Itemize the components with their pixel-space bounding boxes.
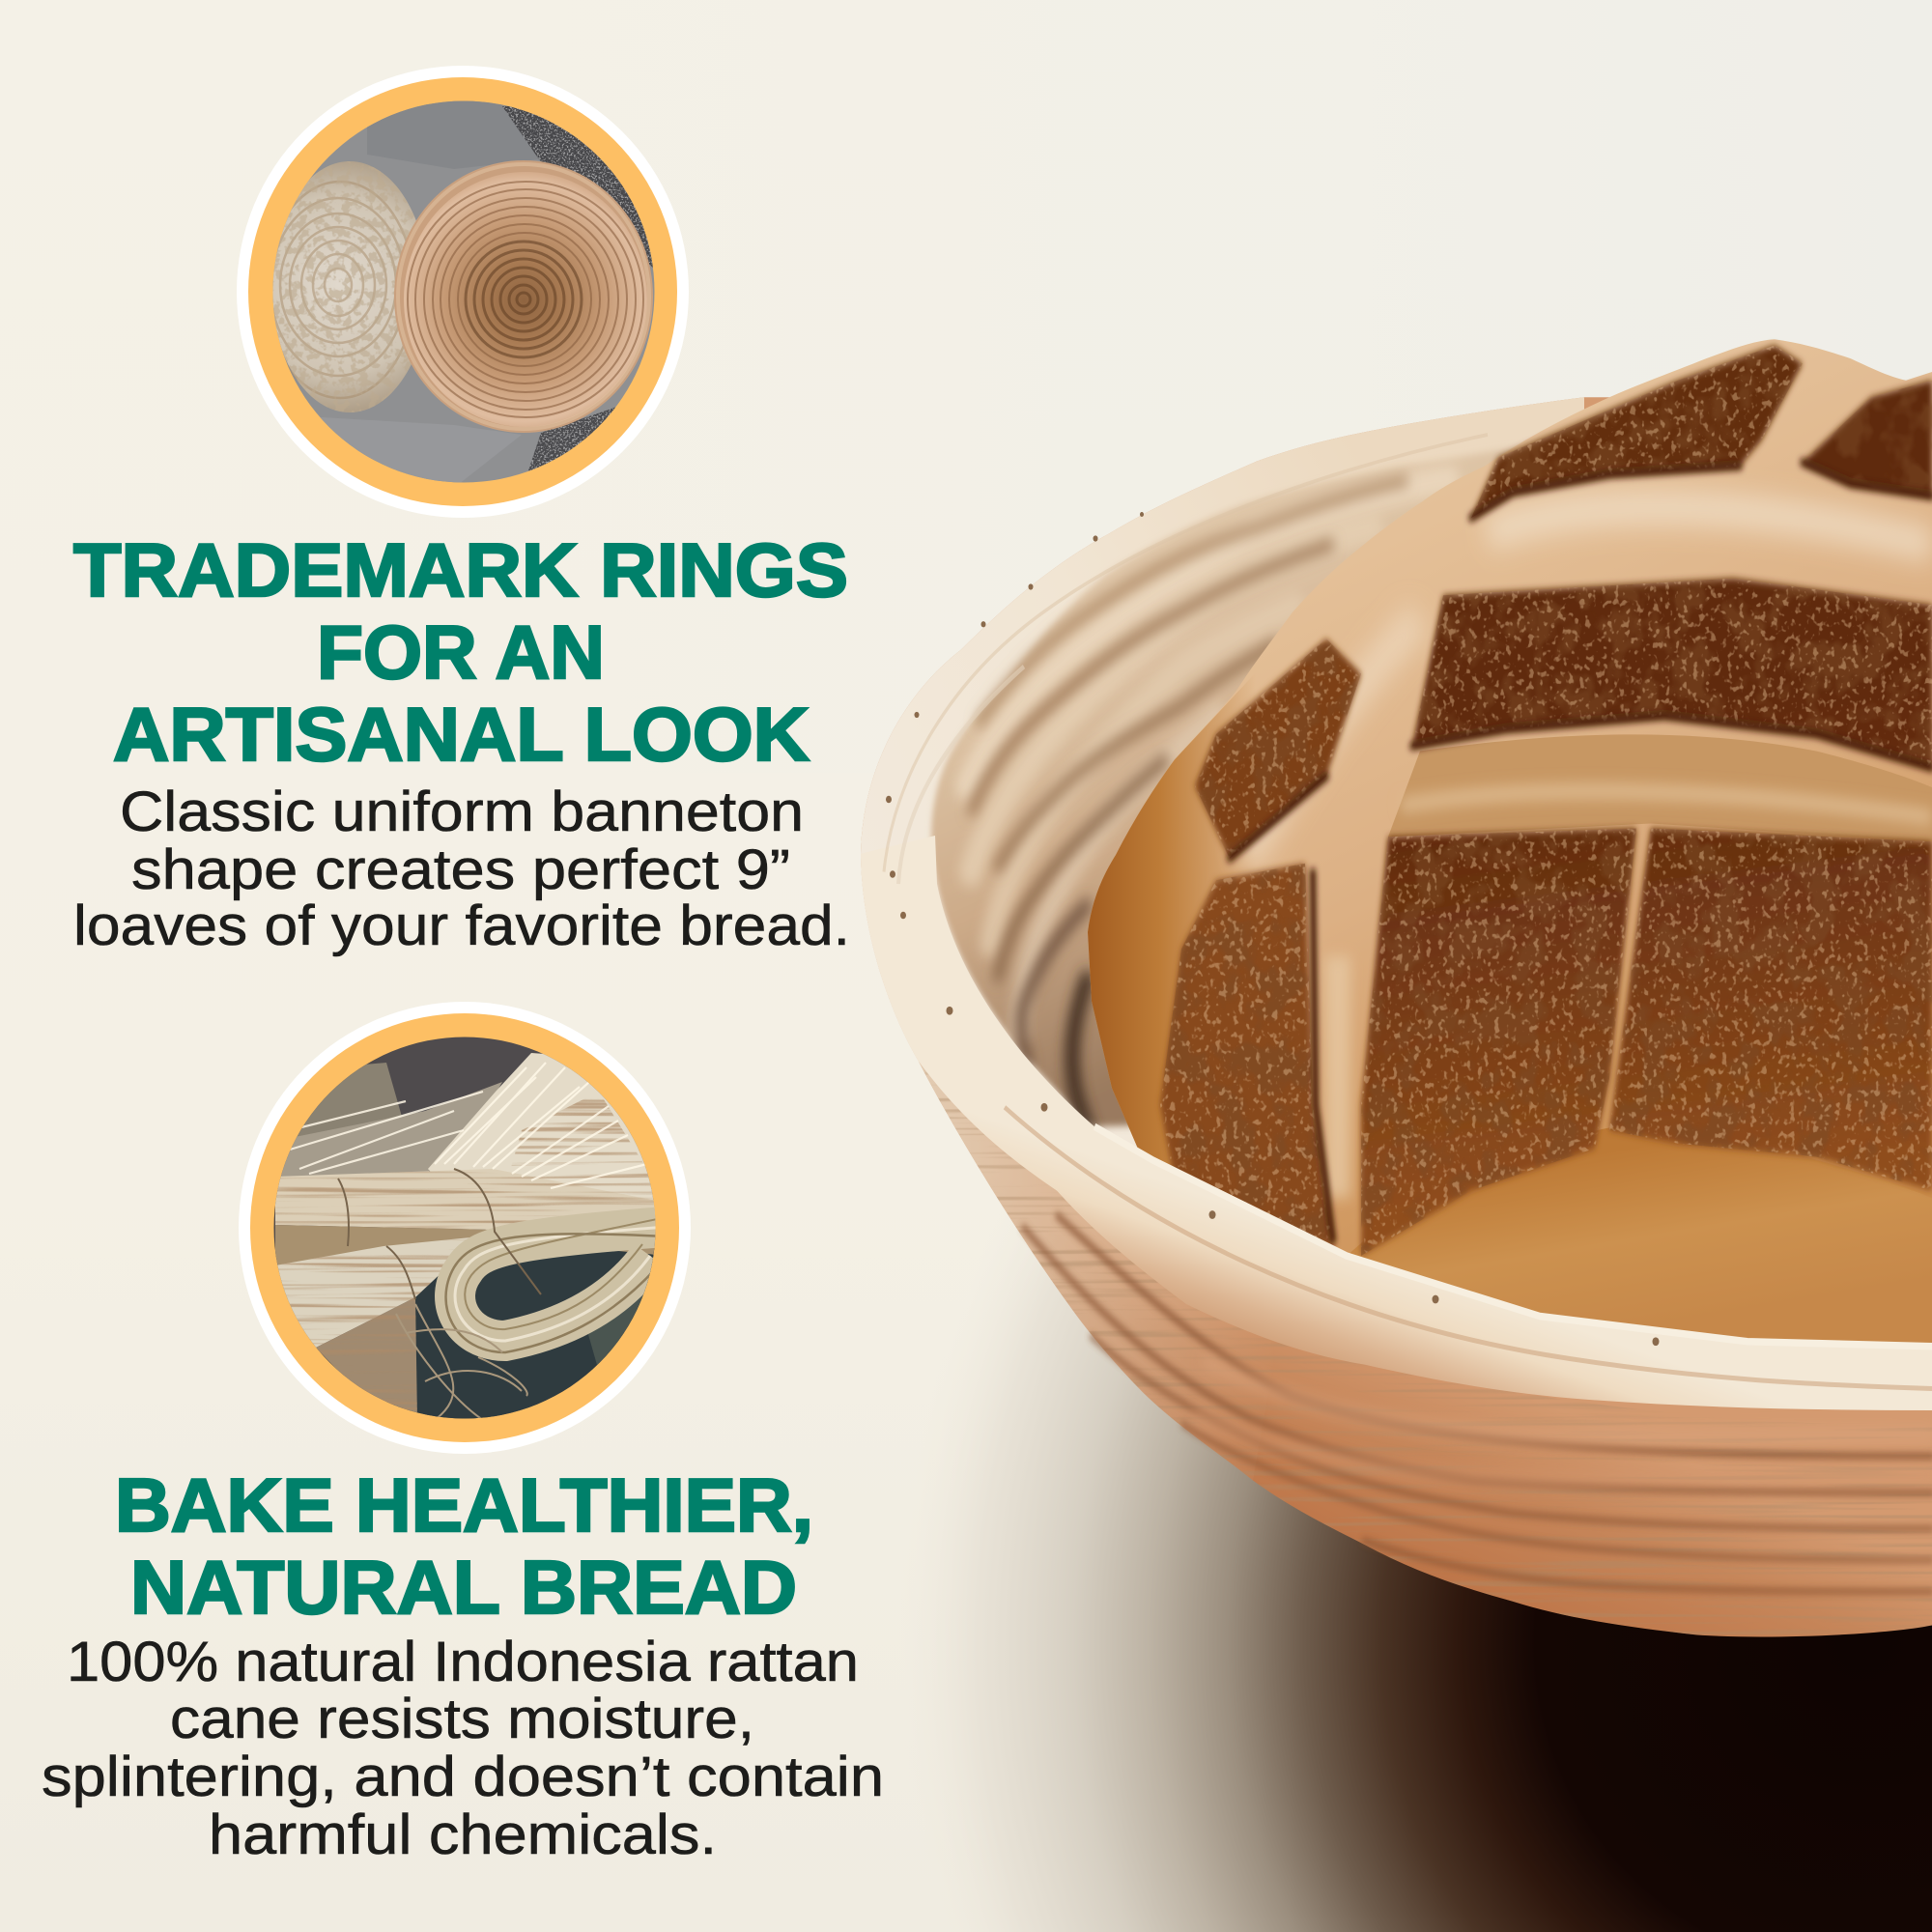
- loaf lower band: [1347, 1125, 1932, 1354]
- bowl interior wall: [931, 437, 1584, 1126]
- feature 1: heading: ARTISANAL LOOK: [113, 692, 810, 777]
- main bundle: [275, 1169, 667, 1232]
- feature 2: description: [42, 1631, 884, 1866]
- white ring: [239, 1002, 691, 1454]
- sourdough loaf: [1088, 339, 1932, 1354]
- loaf side: [1088, 672, 1256, 1209]
- cane loop: [446, 1217, 667, 1352]
- feature 1: description: Classic uniform banneton: [120, 781, 804, 843]
- photo: banneton and floured loaf: [272, 100, 655, 483]
- crust score shadows: [1230, 463, 1932, 1240]
- rim striations: [884, 435, 1932, 1389]
- bowl front rim: [861, 836, 1932, 1410]
- cane strands: [275, 1092, 667, 1420]
- feature 2: heading: NATURAL BREAD: [130, 1545, 797, 1630]
- orange ring: [248, 77, 677, 506]
- floured loaf: [272, 161, 416, 412]
- orange ring: [250, 1013, 679, 1442]
- feature 2: description: splintering, and doesn’t contain: [42, 1746, 884, 1808]
- crust patches: [1160, 346, 1932, 1256]
- cane fan: [428, 1053, 667, 1230]
- feature 2: heading: [115, 1463, 813, 1630]
- bowl outer body: [861, 397, 1932, 1636]
- feature 1: heading: TRADEMARK RINGS: [73, 527, 848, 612]
- bowl outer grooves: [1024, 1216, 1932, 1592]
- white ring: [237, 66, 689, 518]
- feature 1: circular photo: [237, 66, 689, 518]
- feature 2: circular photo: [239, 1002, 691, 1454]
- crust bubbles: [1160, 346, 1932, 1256]
- banneton: [394, 160, 653, 433]
- feature 2: heading: BAKE HEALTHIER,: [115, 1463, 813, 1548]
- feature 2: description: harmful chemicals.: [209, 1804, 717, 1866]
- feature 1: description: shape creates perfect 9”: [131, 838, 790, 901]
- loaf crumb: [1088, 339, 1932, 1354]
- lower-left bundle: [275, 1236, 480, 1348]
- feature 1: description: loaves of your favorite bread.: [73, 895, 850, 957]
- photo: rattan cane bundles: [270, 1034, 667, 1430]
- crust mottling: [1160, 346, 1932, 1256]
- feature 2: description: 100% natural Indonesia rattan: [67, 1631, 859, 1693]
- hero photo: banneton bowl with sourdough loaf: [861, 339, 1932, 1636]
- feature 1: heading: [73, 527, 848, 777]
- feature 2: description: cane resists moisture,: [170, 1688, 754, 1750]
- feature 1: heading: FOR AN: [317, 610, 605, 695]
- feature 1: description: [73, 781, 850, 957]
- rim stitch marks: [886, 512, 1660, 1346]
- crumb highlights: [1246, 508, 1932, 1198]
- bowl back rim: [861, 397, 1584, 1246]
- interior rings: [966, 479, 1449, 1125]
